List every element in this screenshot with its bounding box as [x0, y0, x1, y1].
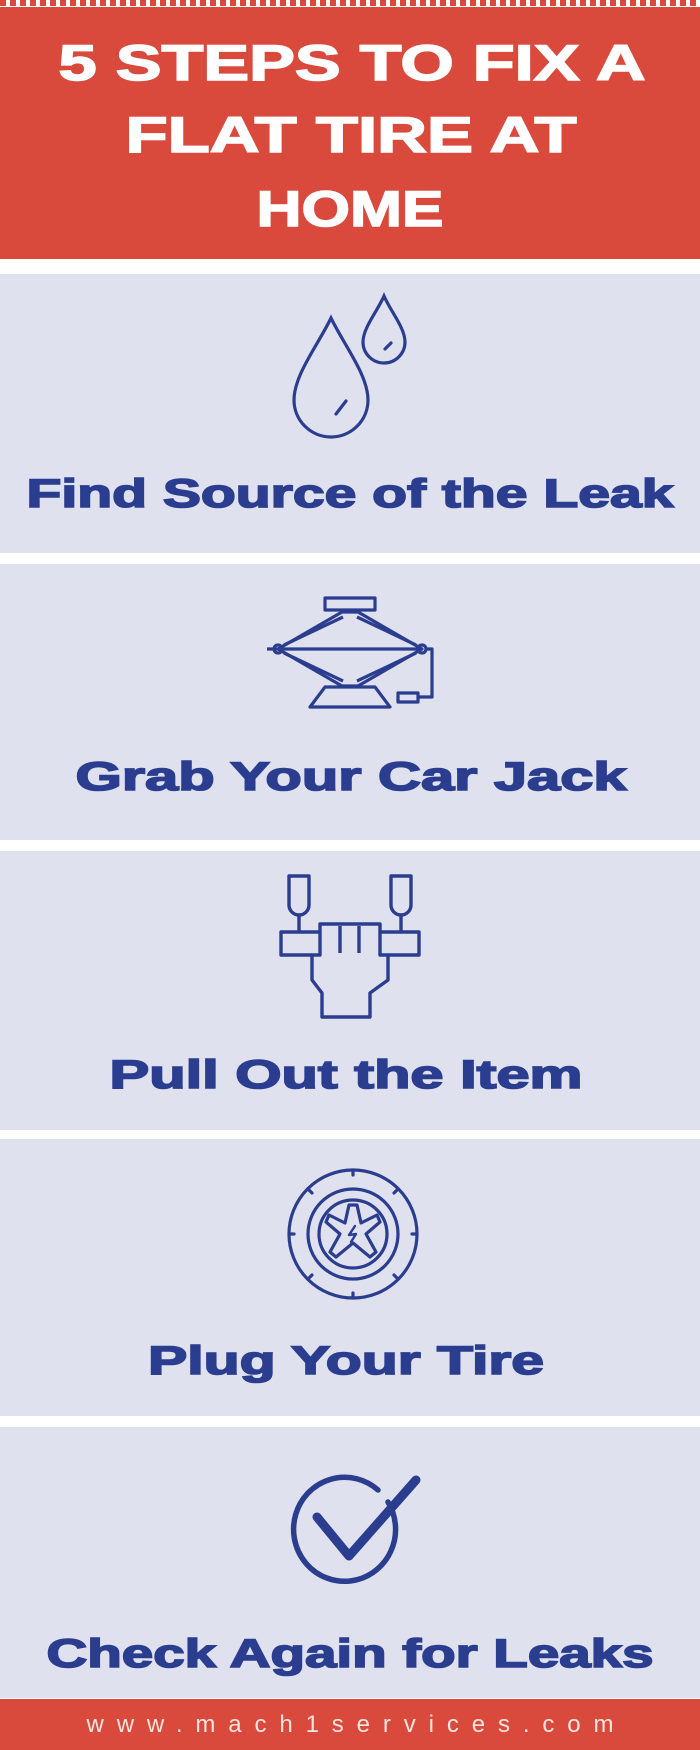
- icon: tire: [289, 1170, 417, 1298]
- label: grab your car jack: Grab Your Car Jack: [76, 755, 628, 799]
- icon: checkmark circle: [294, 1477, 416, 1581]
- panel: step 3 pull out: [0, 851, 700, 1130]
- label: plug your tire: Plug Your Tire: [148, 1339, 544, 1383]
- label: check again for leaks: Check Again for Leaks: [46, 1632, 654, 1676]
- icon: car jack: [267, 598, 432, 707]
- title: FLAT TIRE AT: [126, 107, 576, 163]
- title: [58, 35, 646, 237]
- panel: step 5 check again: [0, 1427, 700, 1698]
- title: HOME: [256, 181, 444, 237]
- title: 5 STEPS TO FIX A: [58, 35, 646, 91]
- header banner: [0, 7, 700, 259]
- icon: water drops: [294, 296, 405, 437]
- label: pull out the item: Pull Out the Item: [110, 1053, 582, 1097]
- label: find source of the leak: Find Source of the Leak: [26, 472, 675, 516]
- footer: [0, 1699, 700, 1750]
- footer url: www.mach1services.com: [86, 1711, 613, 1738]
- panel: step 2 car jack: [0, 564, 700, 840]
- panel: step 1 find leak: [0, 274, 700, 553]
- icon: hand with pliers: [281, 876, 419, 1017]
- panel: step 4 plug tire: [0, 1139, 700, 1416]
